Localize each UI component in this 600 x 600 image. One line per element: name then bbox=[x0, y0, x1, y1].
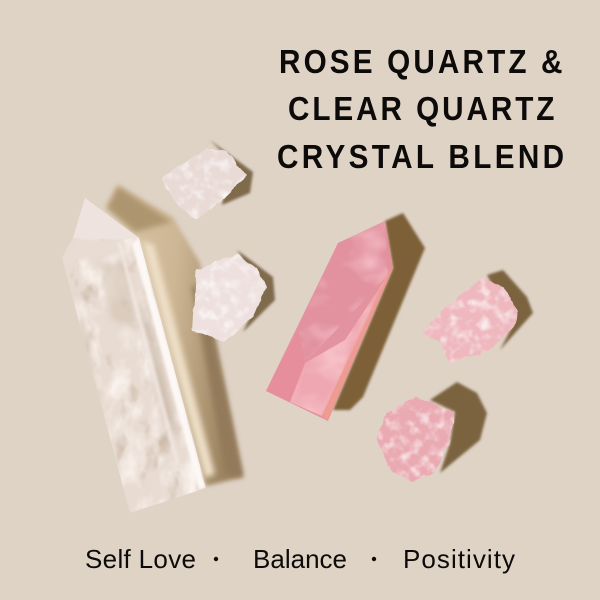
shadow bbox=[210, 140, 253, 205]
benefits line: Balance bbox=[253, 544, 347, 574]
benefits line: Self Love bbox=[85, 544, 196, 574]
clear quartz tower with shadow bbox=[62, 185, 243, 513]
title bbox=[277, 44, 564, 175]
rose rough crystal upper bbox=[423, 270, 533, 363]
tower body bbox=[62, 198, 206, 513]
shadow bbox=[237, 250, 275, 332]
title: CLEAR QUARTZ bbox=[288, 91, 554, 127]
small clear crystal middle bbox=[193, 250, 275, 342]
tower body bbox=[266, 221, 393, 421]
title: ROSE QUARTZ & bbox=[279, 44, 563, 80]
title: CRYSTAL BLEND bbox=[277, 139, 564, 175]
rose quartz tower with shadow bbox=[266, 213, 425, 421]
small clear crystal top bbox=[161, 140, 253, 219]
bullet bbox=[214, 557, 218, 561]
crystal bbox=[376, 397, 455, 482]
benefits line bbox=[85, 544, 515, 574]
shadow bbox=[487, 270, 533, 350]
rose rough crystal lower bbox=[376, 382, 487, 482]
crystal bbox=[193, 254, 266, 342]
bullet bbox=[372, 557, 376, 561]
crystal bbox=[161, 147, 246, 219]
shadow bbox=[430, 382, 487, 473]
benefits line: Positivity bbox=[403, 544, 515, 574]
shadow bbox=[333, 213, 425, 410]
tower shadow bbox=[105, 185, 243, 486]
crystal bbox=[423, 277, 518, 363]
